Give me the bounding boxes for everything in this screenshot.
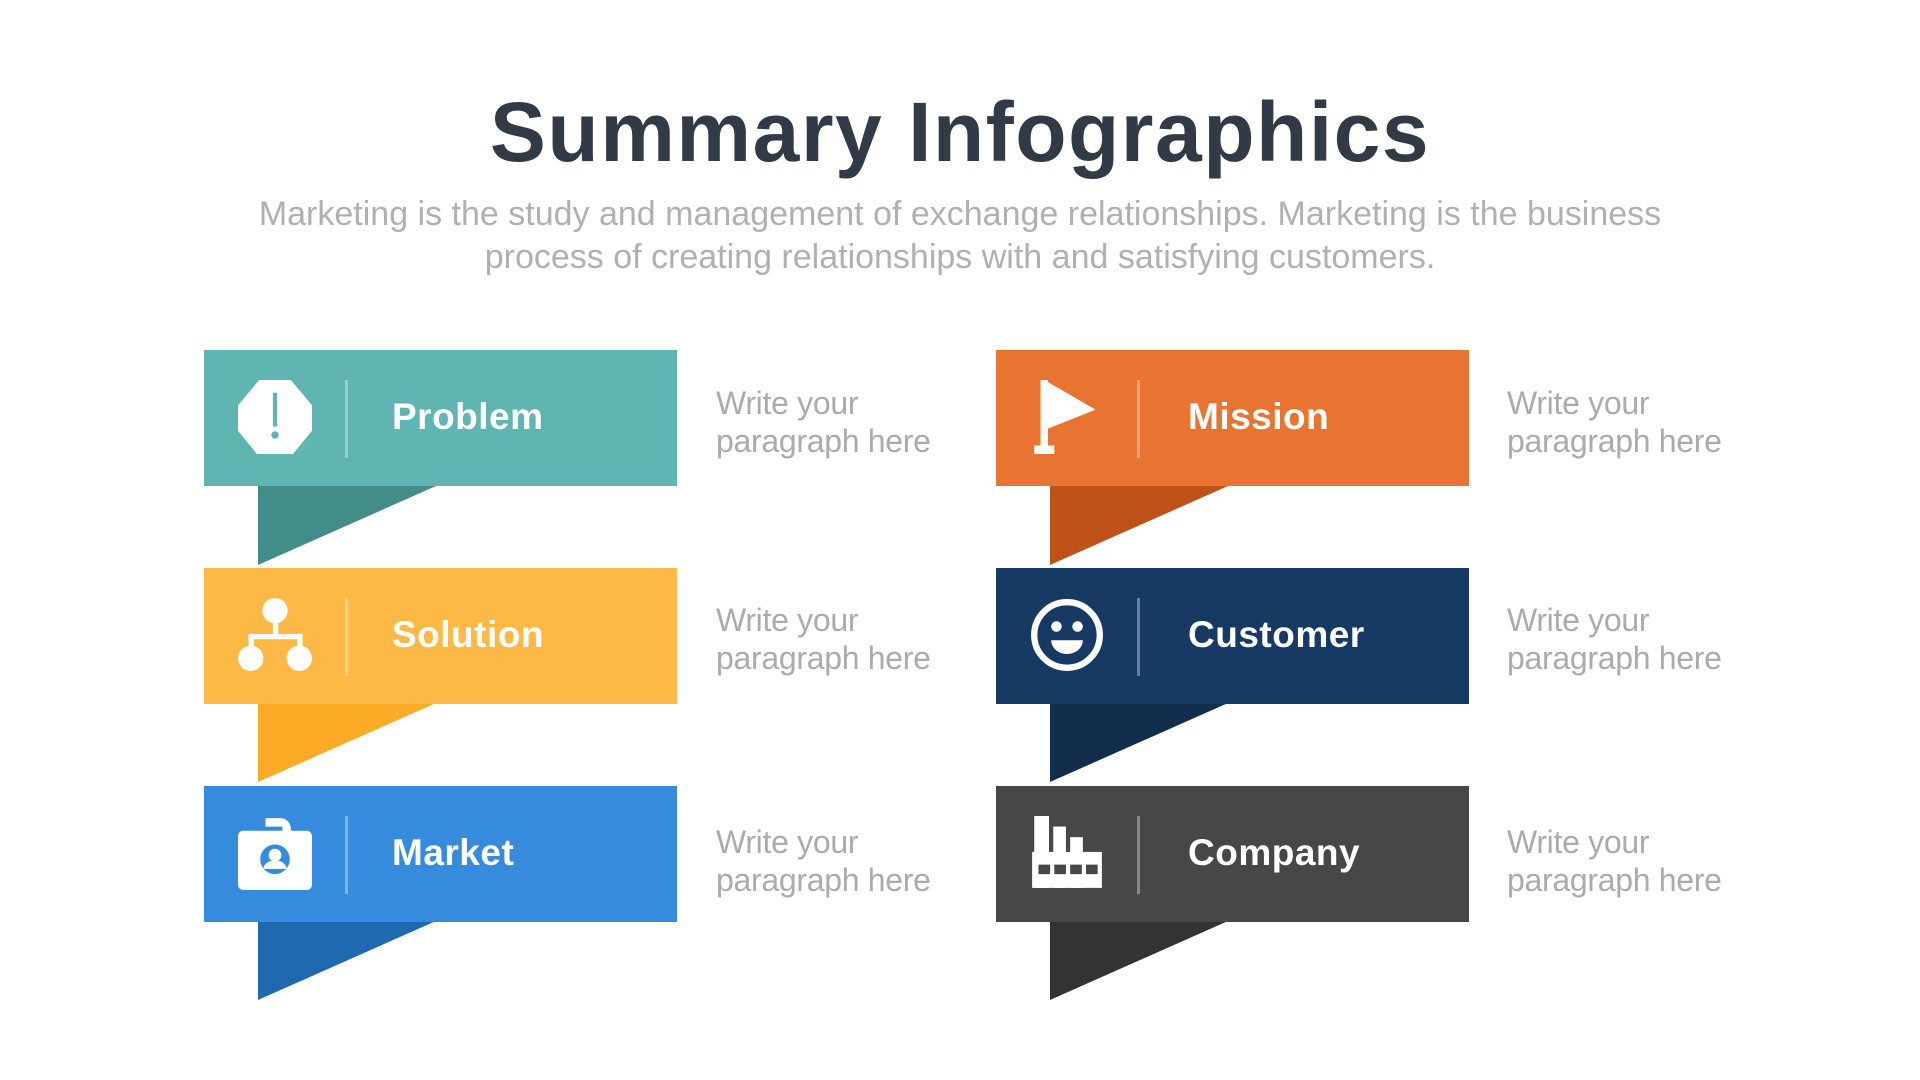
title: Summary Infographics [490, 85, 1430, 179]
panel: mission [996, 350, 1469, 486]
text: solution: Write your paragraph here [716, 602, 931, 676]
label: Solution [392, 614, 544, 655]
panel: problem [204, 350, 677, 486]
panel: solution [204, 568, 677, 704]
icon: smiley [1031, 599, 1103, 671]
subtitle: Marketing is the study and management of exchange relationships. Marketing is the business process of creating relationships with and satisfying customers. [259, 195, 1661, 276]
label: Mission [1188, 396, 1329, 437]
label: Customer [1188, 614, 1365, 655]
text: customer: Write your paragraph here [1507, 602, 1722, 676]
panel: market [204, 786, 677, 922]
icon: factory [1032, 816, 1102, 888]
text: market: Write your paragraph here [716, 824, 931, 898]
icon: flag [1034, 380, 1096, 454]
text: problem: Write your paragraph here [716, 385, 931, 459]
panel: company [996, 786, 1469, 922]
icon: warning octagon [238, 380, 312, 454]
icon: id bag [238, 818, 312, 890]
panel: customer [996, 568, 1469, 704]
label: Market [392, 832, 514, 873]
icon: hierarchy [238, 598, 312, 671]
text: company: Write your paragraph here [1507, 824, 1722, 898]
label: Problem [392, 396, 544, 437]
label: Company [1188, 832, 1360, 873]
text: mission: Write your paragraph here [1507, 385, 1722, 459]
